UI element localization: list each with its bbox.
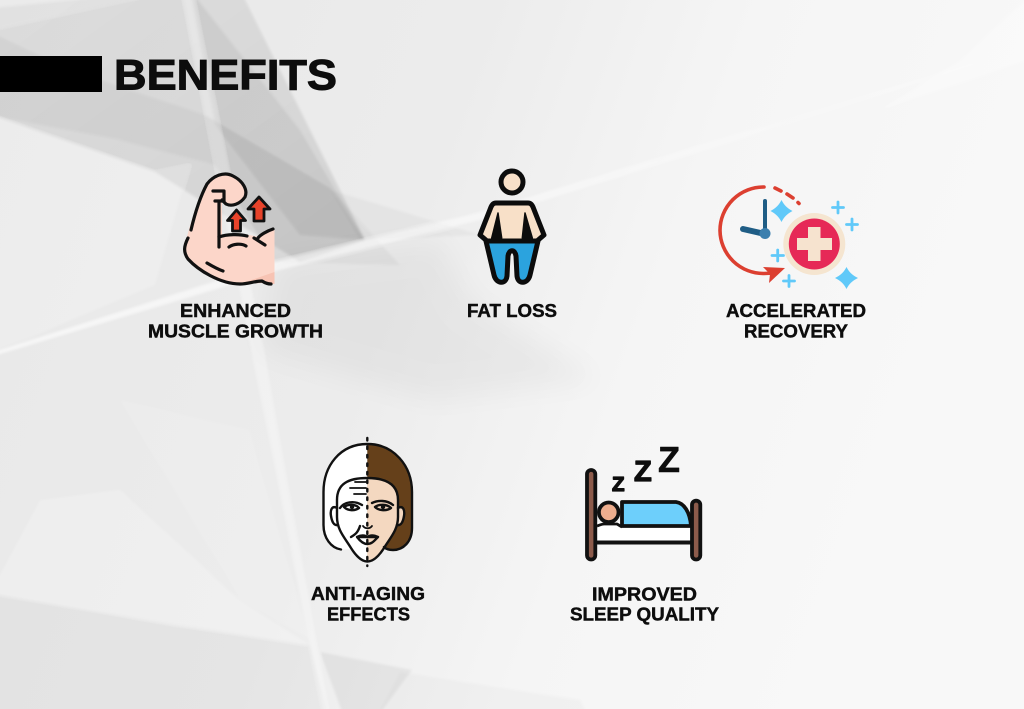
icon: person with loose trousers (480, 171, 544, 282)
label: enhanced muscle growth: MUSCLE GROWTH (148, 320, 323, 342)
icon: clock, recovery arc and medical cross (720, 187, 858, 289)
label: accelerated recovery (726, 300, 866, 342)
icon: person sleeping in bed: Z (658, 439, 680, 480)
label: accelerated recovery: RECOVERY (744, 320, 849, 342)
title: BENEFITS (114, 52, 337, 100)
label: anti-aging effects (311, 583, 425, 625)
label: accelerated recovery: ACCELERATED (726, 300, 866, 321)
label: enhanced muscle growth (148, 300, 323, 342)
label: fat loss: FAT LOSS (467, 300, 557, 321)
label: anti-aging effects: ANTI-AGING (311, 583, 425, 604)
icon: person sleeping in bed: Z (612, 473, 625, 496)
label: improved sleep quality (570, 584, 720, 625)
icon: person sleeping in bed (587, 439, 700, 560)
label: improved sleep quality: IMPROVED (592, 584, 697, 605)
label: anti-aging effects: EFFECTS (327, 604, 410, 625)
icon: person sleeping in bed: Z (634, 456, 652, 488)
icon: flexed arm with arrows (184, 174, 274, 284)
icon: half aged face (324, 438, 412, 566)
label: enhanced muscle growth: ENHANCED (180, 300, 291, 321)
label: improved sleep quality: SLEEP QUALITY (570, 604, 720, 625)
title bar (0, 56, 102, 92)
